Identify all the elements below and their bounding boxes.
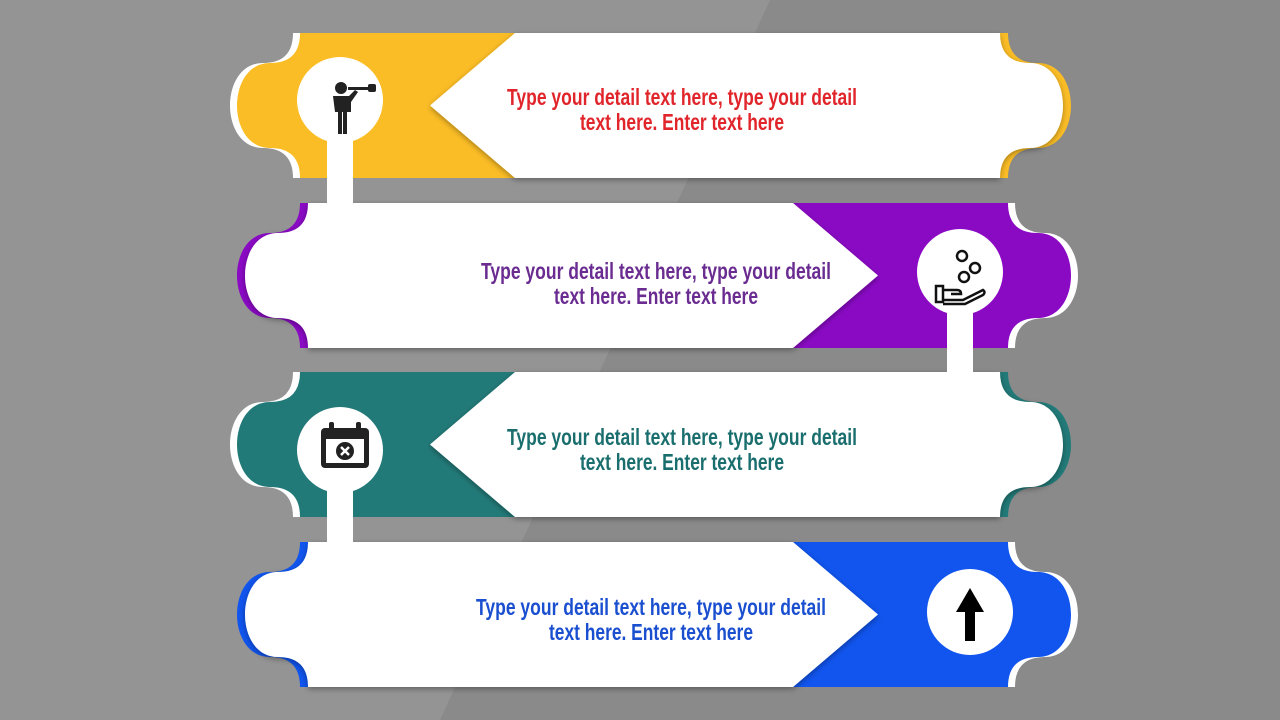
text 1: [507, 84, 857, 135]
icon circle 2: hand with coins: [917, 229, 1003, 315]
icon circle 4: up arrow: [927, 569, 1013, 655]
text 4: [476, 594, 826, 645]
band 2: purple: [237, 203, 1078, 348]
text 3: text here. Enter text here: [580, 449, 784, 475]
band 1: yellow: [230, 33, 1071, 178]
text 2: Type your detail text here, type your detail: [481, 258, 831, 284]
text 2: [481, 258, 831, 309]
text 4: text here. Enter text here: [549, 619, 753, 645]
connector stems: [327, 120, 973, 542]
text 2: text here. Enter text here: [554, 283, 758, 309]
band 4: blue: [237, 542, 1078, 687]
text 1: Type your detail text here, type your detail: [507, 84, 857, 110]
text 3: Type your detail text here, type your detail: [507, 424, 857, 450]
text 1: text here. Enter text here: [580, 109, 784, 135]
icon circle 1: man with telescope: [297, 57, 383, 143]
band 3: teal: [230, 372, 1071, 517]
text 3: [507, 424, 857, 475]
icon circle 3: calendar with cross: [297, 407, 383, 493]
text 4: Type your detail text here, type your detail: [476, 594, 826, 620]
